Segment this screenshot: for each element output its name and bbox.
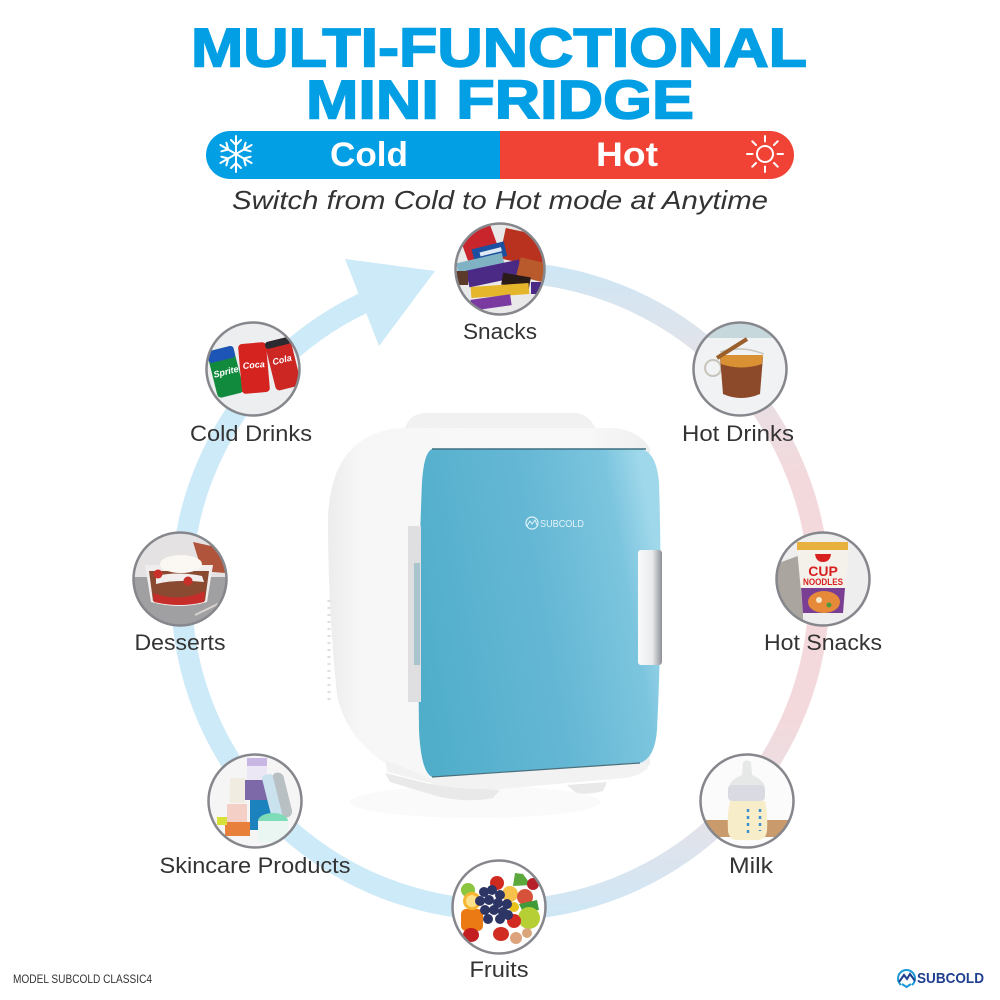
door top seam [432, 448, 646, 450]
icon: fruit and vegetables [452, 860, 546, 954]
title: MINI FRIDGE [306, 68, 694, 130]
icon: soda cans: Coca [242, 359, 265, 371]
icon: mountain badge [898, 970, 915, 987]
item: hot snacks [764, 532, 882, 655]
arrow head [345, 259, 435, 346]
rear vents [328, 600, 330, 705]
label: Skincare Products [160, 853, 350, 878]
icon: baby bottle [700, 754, 794, 848]
item: milk [700, 754, 794, 878]
item: hot drinks [682, 322, 794, 446]
item: desserts [133, 532, 227, 655]
door [418, 449, 661, 777]
brand name: SUBCOLD [917, 970, 984, 987]
door logo: SUBCOLD [540, 518, 584, 530]
icon: soda cans: Cola [271, 353, 293, 367]
base and feet [385, 760, 648, 800]
label: Desserts [134, 630, 226, 655]
icon: snack bars [456, 224, 548, 314]
icon: cup noodles: NOODLES [803, 577, 843, 587]
label: Cold Drinks [190, 421, 312, 446]
brand logo [898, 970, 984, 987]
label: Milk [729, 853, 774, 878]
item: snacks [456, 224, 548, 344]
label: Snacks [463, 319, 537, 344]
icon: skincare products [208, 754, 302, 848]
icon: hot drink mug [693, 322, 787, 416]
icon: soda cans [206, 322, 302, 416]
cold and hot mode switch bar [206, 131, 794, 179]
model number: MODEL SUBCOLD CLASSIC4 [13, 972, 152, 986]
circular arrow ring [181, 259, 819, 910]
left hinge [408, 526, 421, 702]
icon: cup noodles: CUP [808, 563, 838, 579]
door bottom seam [432, 763, 640, 777]
mini fridge [328, 413, 662, 818]
subtitle: Switch from Cold to Hot mode at Anytime [232, 185, 768, 215]
door logo [526, 517, 584, 530]
title: MULTI-FUNCTIONAL [191, 16, 807, 78]
hot label: Hot [596, 136, 658, 174]
label: Fruits [470, 957, 528, 982]
fridge body [328, 428, 650, 778]
icon: soda cans: Sprite [212, 364, 240, 380]
item: cold drinks [190, 322, 312, 446]
icon: snowflake [218, 136, 254, 172]
door handle [638, 550, 662, 665]
floor shadow [350, 786, 600, 818]
label: Hot Snacks [764, 630, 882, 655]
item: fruits [452, 860, 546, 982]
label: Hot Drinks [682, 421, 794, 446]
cold label: Cold [330, 136, 408, 174]
hot arc [500, 272, 819, 910]
icon: dessert glass bowl [133, 532, 227, 626]
icon: cup noodles [776, 532, 870, 626]
top carry handle [404, 413, 597, 432]
cold arc [181, 299, 500, 910]
icon: sun [747, 136, 783, 172]
title [191, 16, 807, 130]
item: skincare products [160, 754, 350, 878]
